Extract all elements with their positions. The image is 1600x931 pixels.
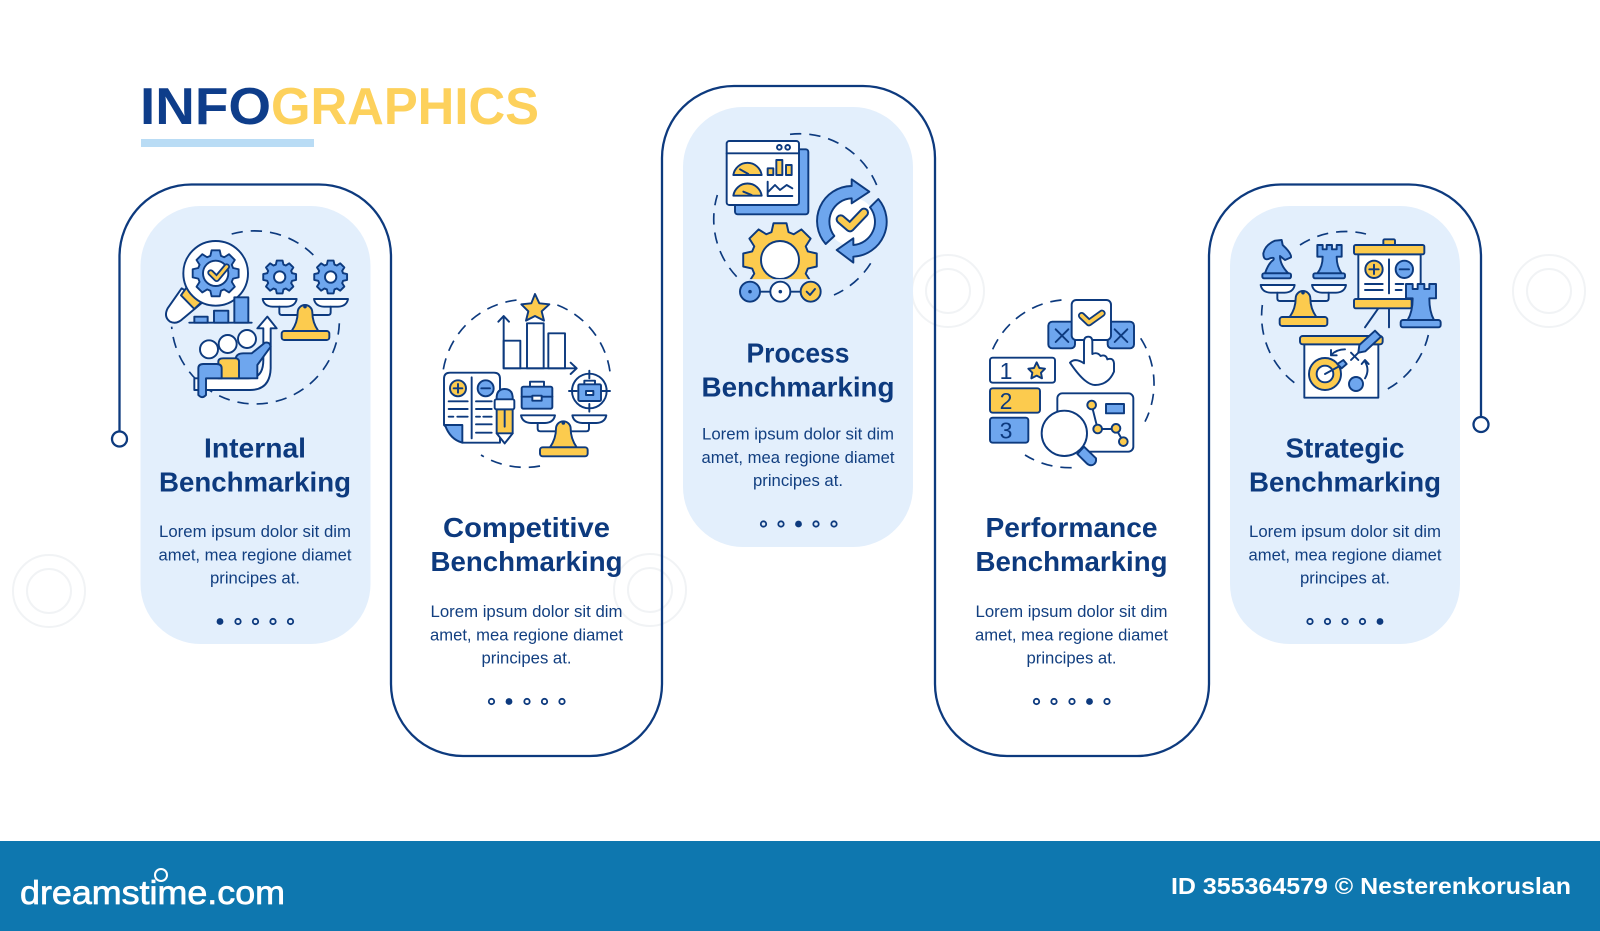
- title: INFO: [140, 78, 271, 136]
- background watermark spirals: [13, 255, 1585, 627]
- body text: principes at.: [210, 570, 300, 588]
- heading: Strategic: [1286, 432, 1404, 464]
- heading: Process: [746, 338, 850, 368]
- body text: Lorem ipsum dolor sit dim: [1249, 523, 1441, 541]
- body text: amet, mea regione diamet: [158, 546, 352, 564]
- body text: amet, mea regione diamet: [702, 449, 895, 467]
- panel: strategic benchmarking: [1230, 206, 1460, 644]
- body text: [430, 603, 623, 668]
- heading: Benchmarking: [976, 546, 1168, 577]
- progress dots: [217, 618, 293, 625]
- icon: internal benchmarking: [166, 231, 348, 404]
- heading: Performance: [986, 512, 1158, 543]
- title: GRAPHICS: [271, 78, 539, 136]
- rank numbers: 1: [1000, 358, 1012, 384]
- body text: amet, mea regione diamet: [430, 626, 623, 644]
- icon: process benchmarking: [714, 134, 887, 302]
- body text: [1248, 523, 1442, 588]
- heading: [702, 338, 894, 402]
- rank numbers: 2: [1000, 388, 1012, 414]
- heading: [430, 512, 622, 577]
- heading: [1249, 432, 1441, 498]
- body text: Lorem ipsum dolor sit dim: [702, 426, 894, 444]
- title: [140, 78, 539, 147]
- body text: [702, 426, 895, 490]
- footer bar: [0, 841, 1600, 931]
- body text: amet, mea regione diamet: [1248, 546, 1442, 564]
- heading: Competitive: [443, 512, 610, 543]
- panel: competitive benchmarking: [430, 294, 623, 705]
- rank numbers: 3: [1000, 418, 1012, 444]
- body text: Lorem ipsum dolor sit dim: [159, 523, 351, 541]
- heading: Benchmarking: [1249, 466, 1441, 498]
- heading: Benchmarking: [702, 372, 894, 402]
- body text: principes at.: [1300, 570, 1390, 588]
- footer logo: dreamstime.com: [20, 874, 285, 911]
- image id and credit: ID 355364579 © Nesterenkoruslan: [1171, 873, 1571, 899]
- heading: [976, 512, 1168, 577]
- rank numbers: [1000, 358, 1012, 444]
- body text: principes at.: [1026, 650, 1116, 668]
- body text: Lorem ipsum dolor sit dim: [430, 603, 622, 621]
- progress dots: [1034, 698, 1110, 705]
- progress dots: [1307, 618, 1383, 625]
- heading: [159, 432, 351, 498]
- body text: principes at.: [753, 472, 843, 490]
- panel: internal benchmarking: [140, 206, 370, 644]
- body text: principes at.: [482, 650, 572, 668]
- body text: [158, 523, 352, 588]
- icon: strategic benchmarking: [1261, 232, 1441, 398]
- heading: Benchmarking: [159, 466, 351, 498]
- icon: competitive benchmarking: [443, 294, 610, 467]
- heading: Internal: [204, 432, 306, 464]
- panel: performance benchmarking: [975, 300, 1168, 705]
- body text: Lorem ipsum dolor sit dim: [976, 603, 1168, 621]
- body text: amet, mea regione diamet: [975, 626, 1168, 644]
- icon: performance benchmarking: [990, 300, 1154, 468]
- panel: process benchmarking: [683, 107, 913, 547]
- progress dots: [761, 521, 837, 527]
- heading: Benchmarking: [430, 546, 622, 577]
- serpentine outline connecting the five steps: [112, 86, 1488, 756]
- progress dots: [489, 698, 565, 705]
- body text: [975, 603, 1168, 668]
